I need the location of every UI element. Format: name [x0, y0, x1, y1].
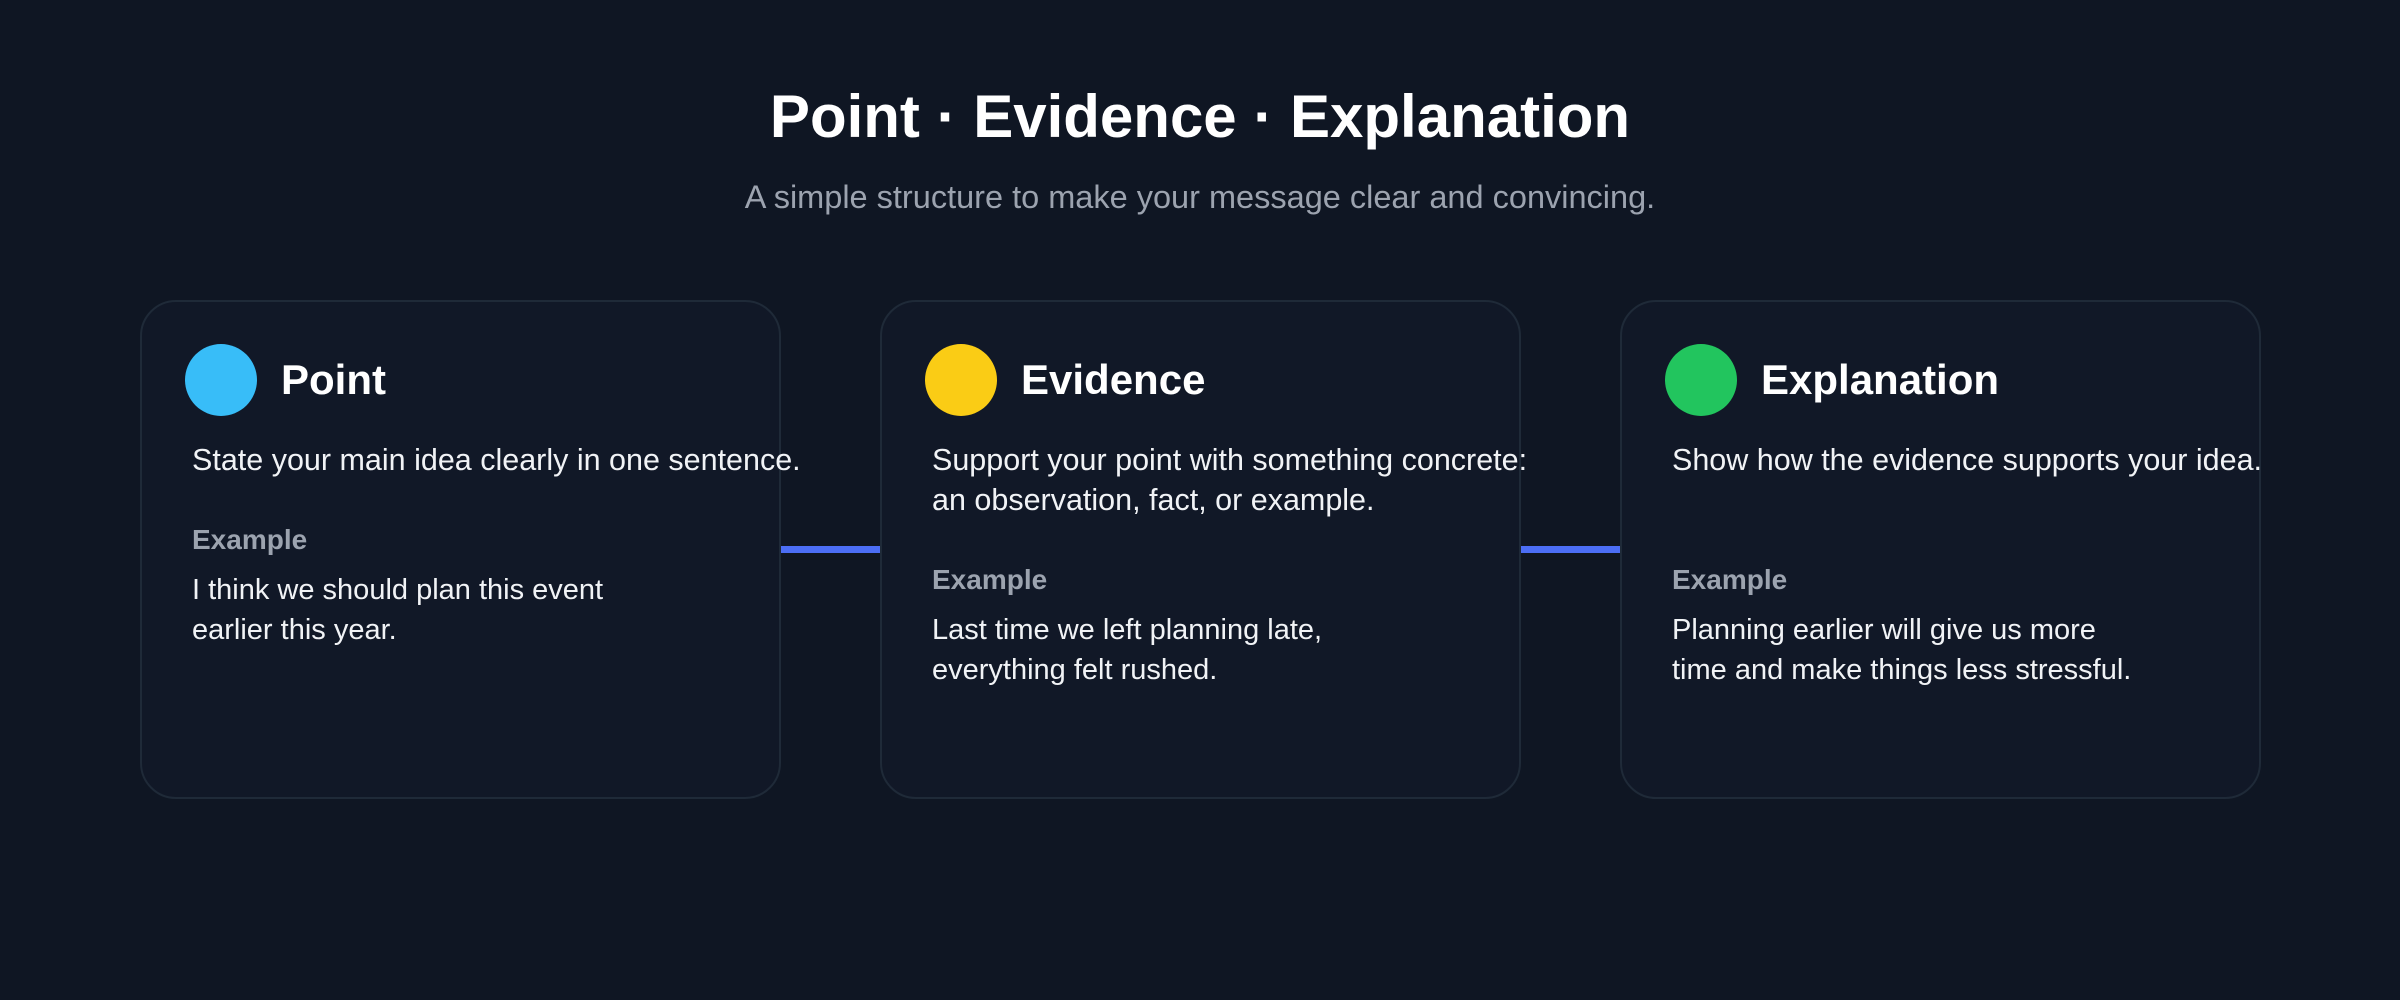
example text — [192, 574, 603, 646]
example text: earlier this year. — [192, 614, 397, 646]
panel: evidence — [880, 300, 1521, 799]
icon: green circle — [1665, 344, 1737, 416]
heading: explanation: Explanation — [1761, 356, 1999, 403]
connector arrow 1 — [779, 546, 882, 553]
title: Point · Evidence · Explanation — [770, 83, 1630, 150]
description — [932, 443, 1527, 517]
example text: everything felt rushed. — [932, 654, 1217, 686]
example label: Example — [192, 524, 307, 555]
heading: evidence: Evidence — [1021, 356, 1205, 403]
example text — [1672, 614, 2131, 686]
panel: explanation — [1620, 300, 2261, 799]
description: Show how the evidence supports your idea. — [1672, 443, 2262, 477]
icon: blue circle — [185, 344, 257, 416]
icon: yellow circle — [925, 344, 997, 416]
connector arrow 2 — [1519, 546, 1622, 553]
example label: Example — [1672, 564, 1787, 595]
example text: Planning earlier will give us more — [1672, 614, 2096, 646]
example label: Example — [932, 564, 1047, 595]
panel: point — [140, 300, 781, 799]
example text: I think we should plan this event — [192, 574, 603, 606]
example text — [932, 614, 1322, 686]
description: Support your point with something concrete: — [932, 443, 1527, 477]
description: State your main idea clearly in one sentence. — [192, 443, 801, 477]
subtitle: A simple structure to make your message clear and convincing. — [745, 179, 1655, 215]
description: an observation, fact, or example. — [932, 483, 1374, 517]
example text: Last time we left planning late, — [932, 614, 1322, 646]
heading: point: Point — [281, 356, 386, 403]
example text: time and make things less stressful. — [1672, 654, 2131, 686]
